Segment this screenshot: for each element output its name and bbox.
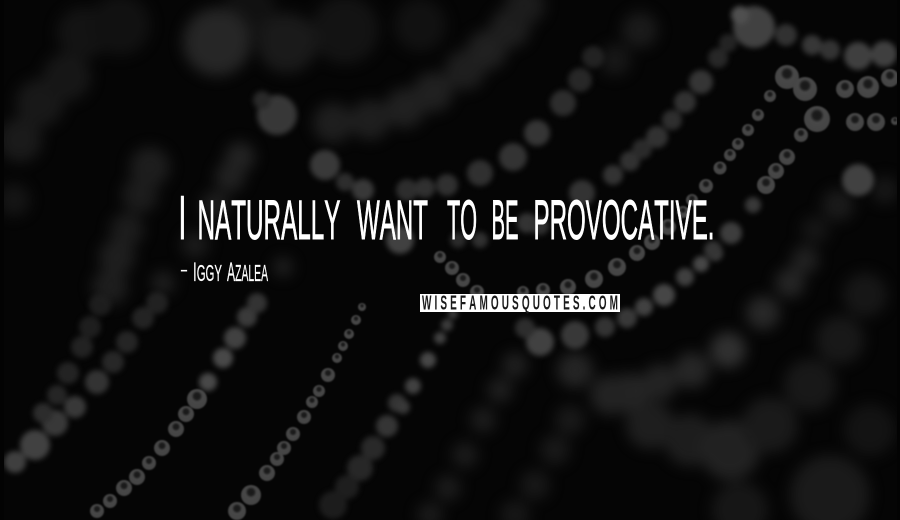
quote text: BE	[492, 188, 518, 251]
author attribution: IGGY	[193, 257, 222, 287]
quote text: PROVOCATIVE.	[534, 190, 715, 252]
quote text	[178, 184, 715, 253]
watermark badge: WISEFAMOUSQUOTES.COM	[422, 293, 618, 315]
author attribution: AZALEA	[227, 257, 268, 287]
quote text: NATURALLY	[198, 190, 340, 252]
author attribution	[181, 257, 268, 287]
sharp water droplet beads	[90, 65, 899, 520]
quote text: I	[178, 184, 186, 253]
quote text: WANT	[357, 190, 428, 252]
lighter beads on the lower left chain	[199, 293, 267, 391]
quote text: TO	[447, 189, 477, 251]
